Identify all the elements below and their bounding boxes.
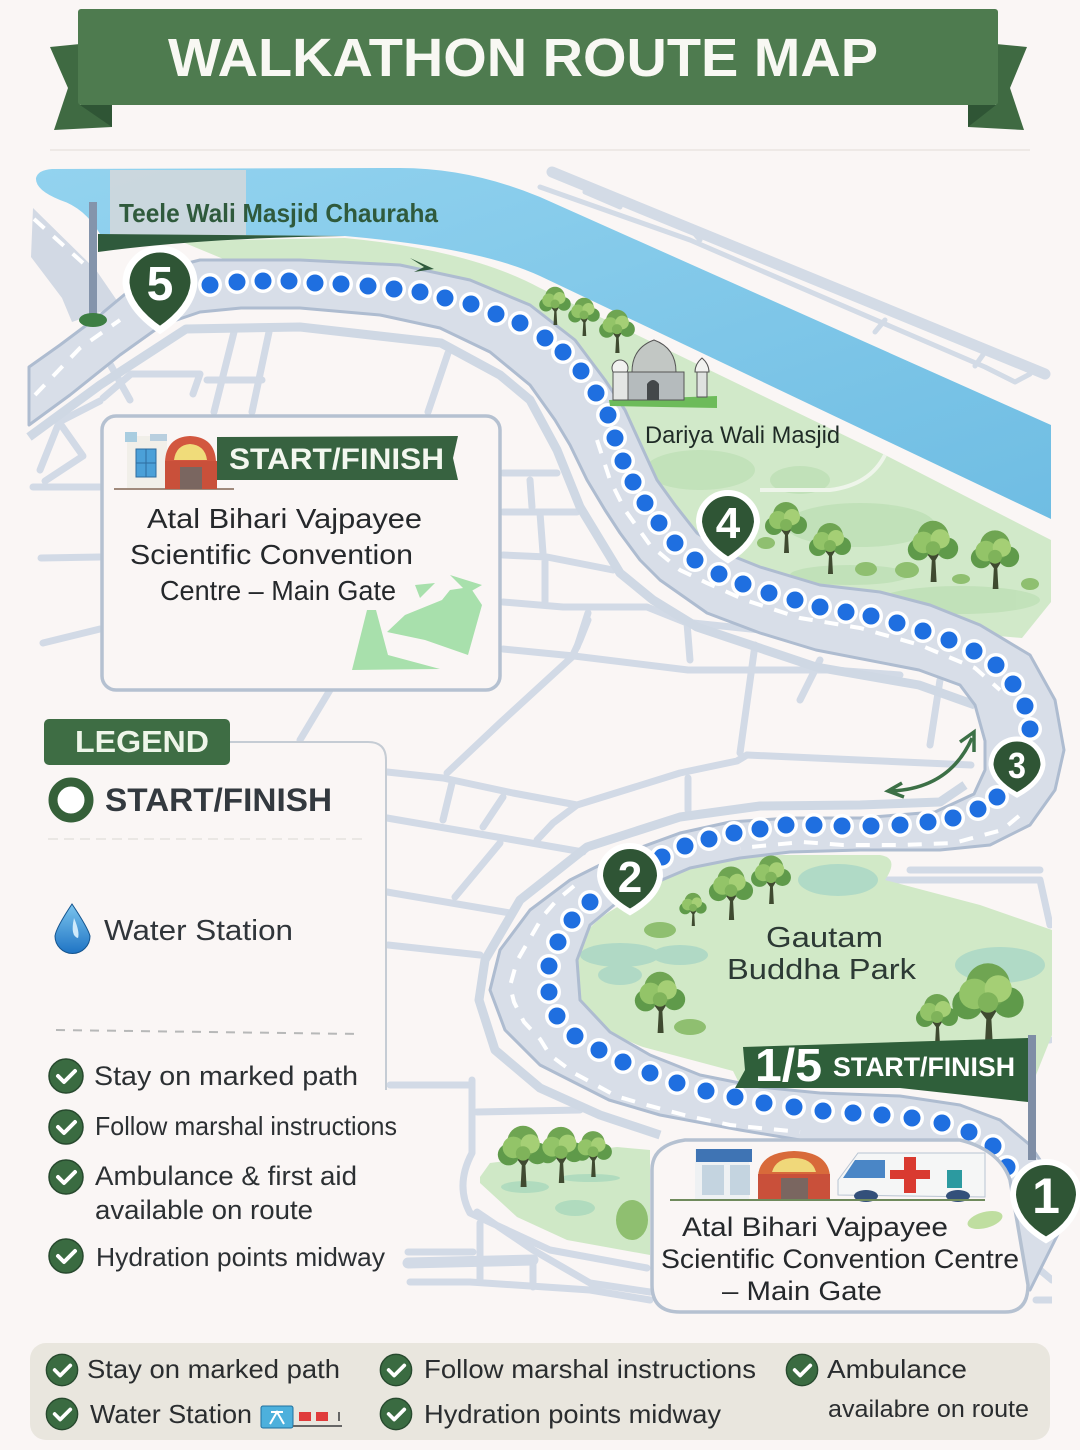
arrow: small chevron — [410, 258, 434, 272]
checklist — [49, 1059, 397, 1273]
green sketch decoration — [352, 575, 482, 670]
road lane dashes — [35, 320, 1019, 1132]
flag text: START/FINISH — [833, 1052, 1015, 1082]
venue name: Atal Bihari Vajpayee — [147, 503, 422, 534]
river — [36, 168, 1051, 519]
checklist: available on route — [95, 1195, 313, 1225]
mosque ground — [609, 396, 717, 408]
icon: water drop — [55, 904, 90, 954]
bank footpath — [760, 455, 885, 490]
flag pole — [89, 202, 97, 320]
pin 2: 2 — [618, 853, 642, 902]
title text: WALKATHON ROUTE MAP — [168, 28, 878, 88]
green river bank — [180, 238, 1051, 638]
legend panel — [44, 719, 397, 1273]
city streets — [33, 332, 1052, 1300]
checklist: Ambulance & first aid — [95, 1161, 357, 1191]
footer items: availabre on route — [828, 1396, 1029, 1423]
flag pole base — [79, 313, 107, 327]
footer checklist bar — [30, 1343, 1050, 1440]
footer items: Ambulance — [827, 1354, 967, 1384]
banner centre — [78, 9, 998, 105]
trees — [498, 287, 1024, 1187]
icon: water tap station — [261, 1406, 342, 1428]
flag swoosh — [98, 234, 345, 252]
dot halos — [198, 269, 1042, 1204]
info card: start/finish top — [102, 416, 500, 690]
flag pole — [1028, 1035, 1036, 1160]
icon: ambulance — [838, 1153, 985, 1202]
mosque door — [647, 380, 659, 400]
mosque right minaret — [695, 358, 709, 397]
checklist: Follow marshal instructions — [95, 1111, 397, 1141]
start/finish flag 1/5 — [735, 1035, 1036, 1160]
label: Dariya Wali Masjid: Dariya Wali Masjid — [645, 422, 840, 449]
venue name: Scientific Convention — [130, 539, 413, 570]
park ponds and shrubs — [580, 864, 1045, 985]
mosque left minaret — [612, 360, 628, 400]
footer items: Stay on marked path — [87, 1354, 340, 1384]
pin 1 — [1013, 1162, 1079, 1240]
legend tab — [44, 719, 230, 765]
footer background — [30, 1343, 1050, 1440]
blue route dots — [202, 272, 1038, 1200]
main road surface — [29, 260, 1064, 1290]
arrow: double-headed turn — [888, 732, 974, 797]
title banner — [50, 9, 1027, 130]
mosque dome — [632, 340, 676, 372]
checklist: Hydration points midway — [96, 1242, 385, 1272]
pin 3 — [991, 739, 1043, 795]
panel box — [46, 742, 386, 1090]
venue name: Atal Bihari Vajpayee — [682, 1212, 948, 1242]
pin 5 — [126, 249, 194, 330]
small south-west park — [480, 1147, 650, 1255]
park: Gautam Buddha — [575, 855, 1052, 1090]
banner right tail — [968, 44, 1027, 130]
pin 4: 4 — [716, 499, 741, 548]
flag number: 1/5 — [755, 1039, 822, 1091]
label: Gautam Buddha Park: Buddha Park — [727, 954, 917, 986]
venue name: Centre – Main Gate — [160, 575, 396, 606]
pin 5: 5 — [147, 258, 173, 311]
route dots — [198, 269, 1042, 1204]
venue name — [130, 503, 422, 606]
footer items: Water Station — [90, 1399, 252, 1429]
pin 4 — [699, 493, 757, 560]
map — [29, 168, 1079, 1312]
icon: convention building — [114, 432, 234, 490]
water station label: Water Station — [104, 915, 293, 947]
label: Gautam Buddha Park: Gautam — [766, 922, 883, 954]
legend heading: LEGEND — [75, 724, 209, 759]
start/finish label: START/FINISH — [105, 782, 332, 818]
pin 1: 1 — [1032, 1168, 1060, 1224]
secondary parallel roads — [29, 327, 975, 1135]
footer items: Follow marshal instructions — [424, 1354, 756, 1384]
venue name: – Main Gate — [722, 1276, 882, 1306]
mosque main hall — [628, 372, 684, 400]
banner left tail — [50, 44, 112, 130]
label text: Teele Wali Masjid Chauraha — [119, 198, 438, 228]
west junction road — [31, 208, 120, 322]
flag: Teele Wali Masjid Chauraha — [79, 198, 438, 327]
banner fold shadows — [80, 105, 996, 127]
mosque: Dariya Wali Masjid — [609, 340, 717, 408]
venue name: Scientific Convention Centre — [661, 1244, 1019, 1274]
checklist: Stay on marked path — [94, 1061, 358, 1091]
icon: building — [695, 1149, 752, 1199]
north road along river — [540, 172, 1045, 382]
footer items: Hydration points midway — [424, 1399, 721, 1429]
green accent — [966, 1208, 1004, 1232]
start/finish ring — [53, 782, 89, 818]
label: Gautam Buddha Park — [727, 922, 917, 986]
pin 2 — [600, 846, 660, 912]
south-west park patches — [501, 1174, 620, 1216]
info card: start/finish bottom — [652, 1140, 1028, 1312]
venue name — [661, 1212, 1019, 1306]
bank shading patches — [645, 450, 1040, 614]
icon: arch gate — [758, 1151, 830, 1199]
ribbon — [217, 436, 458, 480]
card box — [652, 1140, 1028, 1312]
blurred block by flag — [110, 170, 246, 235]
flag body — [735, 1038, 1028, 1102]
card box — [102, 416, 500, 690]
footer items — [46, 1354, 1029, 1430]
ribbon text: START/FINISH — [229, 443, 444, 476]
pin 3: 3 — [1008, 745, 1026, 786]
shrubs — [616, 537, 1039, 1240]
